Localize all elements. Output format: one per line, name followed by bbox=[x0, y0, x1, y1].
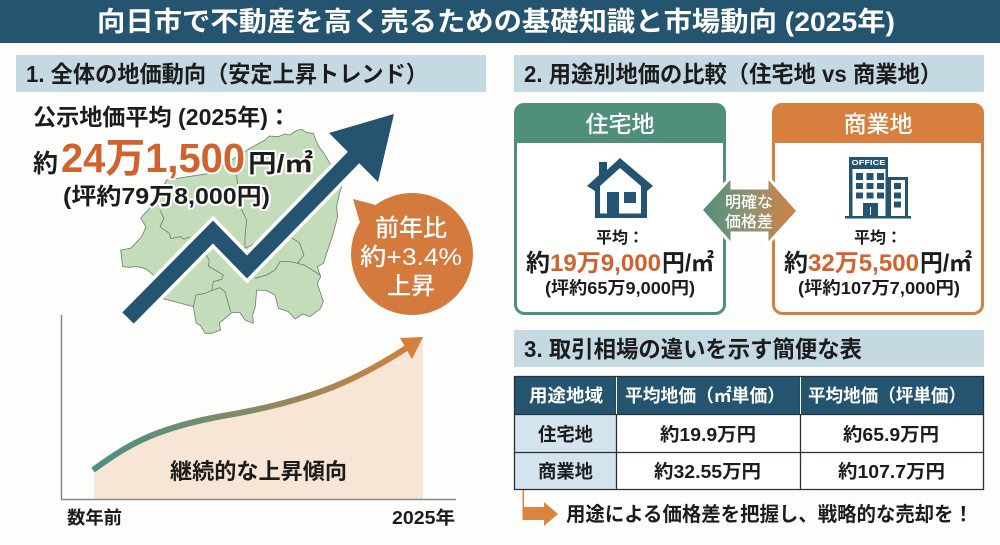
table: 住宅地 bbox=[538, 424, 593, 445]
title banner bbox=[0, 0, 1000, 43]
panel: price comparison table bbox=[514, 330, 984, 526]
table: 約65.9万円 bbox=[843, 424, 939, 445]
card: residential land: 19万9,000 bbox=[550, 250, 661, 277]
card: residential land: 平均： bbox=[596, 229, 644, 247]
conclusion arrow and message bbox=[522, 490, 973, 526]
panel: overall land price trend bbox=[16, 55, 486, 528]
card: residential land: 約 bbox=[526, 250, 550, 277]
table: 平均地価（坪単価） bbox=[808, 385, 966, 406]
published land price text: 24万1,500 bbox=[61, 135, 245, 181]
card: residential land: 円/㎡ bbox=[662, 249, 714, 277]
card: residential land: 住宅地 bbox=[586, 111, 654, 137]
card: commercial land: (坪約107万7,000円) bbox=[798, 278, 960, 298]
card: commercial land: 約 bbox=[784, 250, 808, 277]
section heading 1 bbox=[16, 55, 486, 92]
arrow: clear price gap: 明確な bbox=[725, 194, 773, 212]
table: 約32.55万円 bbox=[654, 461, 761, 482]
section heading 2: 2. 用途別地価の比較（住宅地 vs 商業地） bbox=[524, 61, 942, 87]
rising trend arrow bbox=[128, 114, 394, 318]
published land price text: (坪約79万8,000円) bbox=[63, 183, 270, 209]
table: 用途地域 bbox=[529, 386, 603, 406]
callout: year over year rise bbox=[351, 193, 473, 315]
area chart: continuous upward trend: 継続的な上昇傾向 bbox=[170, 459, 347, 484]
icon: house bbox=[587, 158, 653, 218]
section heading 1: 1. 全体の地価動向（安定上昇トレンド） bbox=[26, 61, 428, 87]
card: commercial land: 円/㎡ bbox=[920, 249, 972, 277]
arrow: clear price gap: 価格差 bbox=[725, 213, 773, 231]
card: residential land bbox=[514, 103, 726, 314]
published land price text: 公示地価平均 (2025年)： bbox=[33, 104, 291, 130]
callout: year over year rise: 前年比 bbox=[375, 215, 447, 242]
table: 約107.7万円 bbox=[838, 461, 945, 482]
area chart: continuous upward trend: 2025年 bbox=[392, 507, 455, 528]
card: residential land: (坪約65万9,000円) bbox=[545, 278, 695, 298]
map of Muko city bbox=[121, 129, 342, 333]
section heading 3: 3. 取引相場の違いを示す簡便な表 bbox=[524, 336, 862, 362]
card: commercial land: 商業地 bbox=[844, 111, 912, 137]
table bbox=[514, 376, 984, 490]
card: commercial land: 32万5,500 bbox=[808, 250, 919, 277]
table: 約19.9万円 bbox=[660, 424, 756, 445]
icon: office building bbox=[845, 157, 911, 218]
title banner: 向日市で不動産を高く売るための基礎知識と市場動向 (2025年) bbox=[97, 7, 895, 37]
card: commercial land bbox=[772, 103, 984, 314]
table: 平均地価（㎡単価） bbox=[625, 385, 785, 406]
callout: year over year rise: 約+3.4% bbox=[360, 244, 462, 271]
section heading 3 bbox=[514, 330, 984, 367]
published land price text bbox=[33, 104, 313, 209]
callout: year over year rise: 上昇 bbox=[387, 273, 435, 300]
panel: land price comparison by use bbox=[514, 55, 984, 314]
published land price text: 約 bbox=[33, 150, 58, 178]
section heading 2 bbox=[514, 55, 984, 92]
arrow: clear price gap bbox=[701, 176, 798, 245]
published land price text: 円/㎡ bbox=[248, 149, 313, 178]
icon: office building: OFFICE bbox=[852, 160, 886, 167]
area chart: continuous upward trend bbox=[62, 315, 456, 528]
area chart: continuous upward trend: 数年前 bbox=[67, 507, 122, 528]
conclusion arrow and message: 用途による価格差を把握し、戦略的な売却を！ bbox=[566, 502, 973, 526]
card: commercial land: 平均： bbox=[854, 229, 902, 247]
table: 商業地 bbox=[538, 461, 593, 482]
